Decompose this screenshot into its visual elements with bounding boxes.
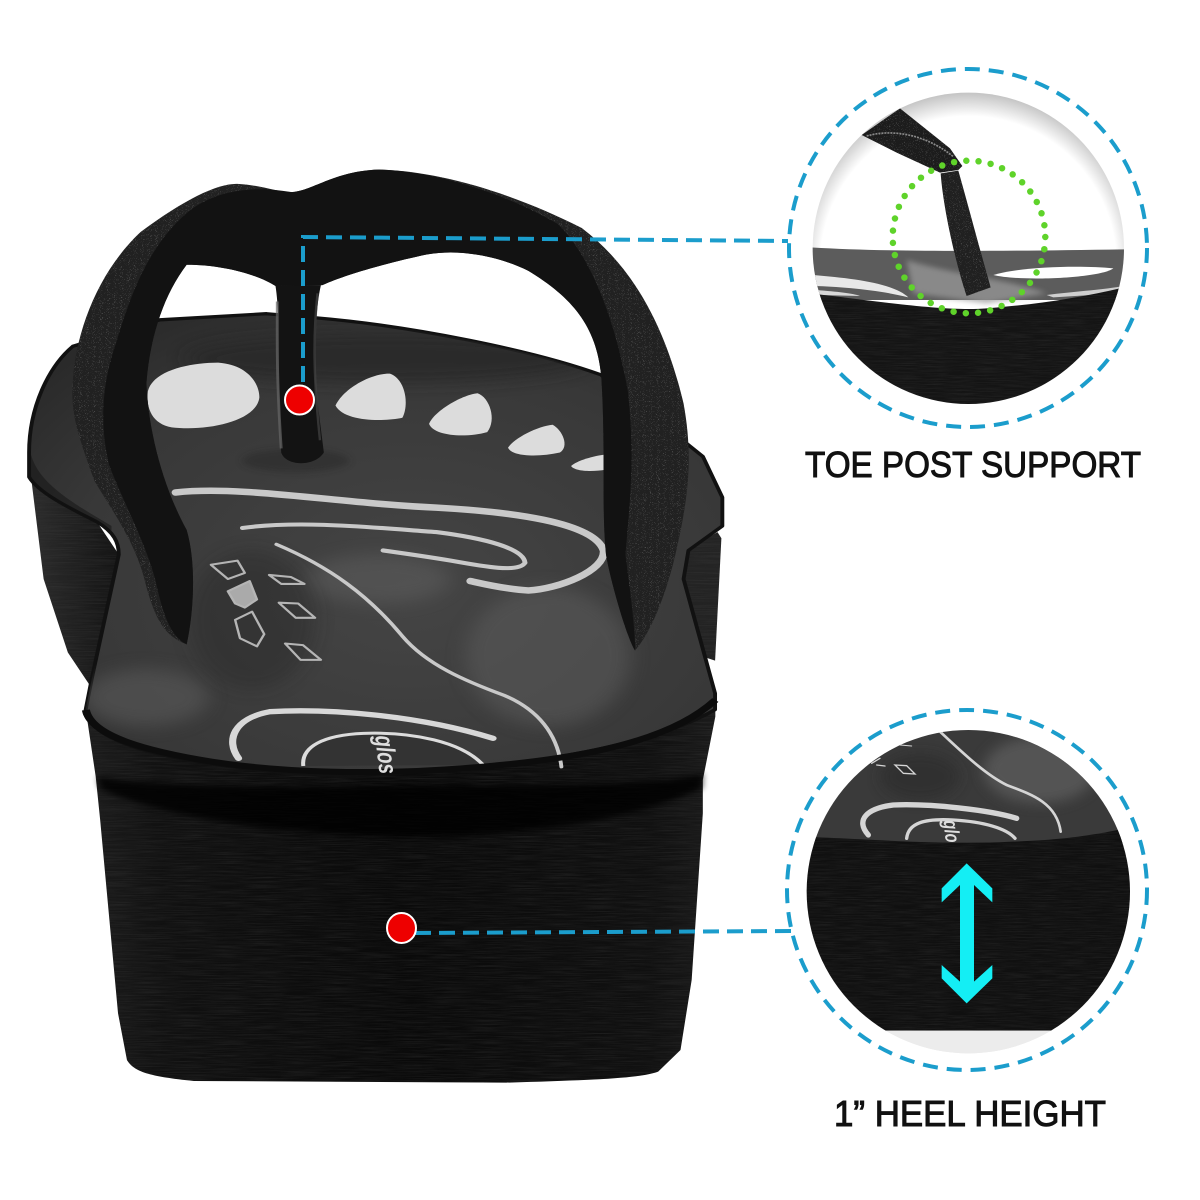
right wedge side [679,532,721,661]
marker: toe post [285,386,314,414]
logo text: glos [369,734,404,775]
callout: toe post support [789,69,1147,485]
sandal [15,170,795,1083]
callout: heel height [787,710,1147,1134]
rim edge [86,700,715,772]
heel block [87,693,715,1083]
surface shading [15,334,630,726]
left wedge side [32,481,119,685]
footbed platform [15,314,722,774]
platform surface [29,314,722,774]
detail lens [810,90,1127,407]
strap and toe post [72,170,689,650]
strap glitter edge [72,170,689,650]
platform edge [810,247,1127,300]
marker: heel [387,913,416,943]
sole [810,287,1127,407]
detail lens [803,727,1133,1061]
footbed lines [863,732,1061,838]
label: toe post support: TOE POST SUPPORT [805,444,1141,485]
height arrow [942,863,992,1003]
floor fade [886,1030,1051,1031]
toe dots [148,363,606,471]
strap piece [862,108,962,173]
toe gaps [993,267,1113,278]
green dotted highlight [893,161,1045,313]
toe post [275,285,324,463]
connector line: heel [415,931,795,933]
logo text: glos [939,819,965,851]
leaf and diamond marks [211,561,321,660]
footprint contour lines [175,491,604,767]
dashed ring [789,69,1147,427]
heel band [803,827,1133,1031]
label: heel height: 1” HEEL HEIGHT [834,1093,1106,1134]
connector line: toe post [303,237,788,382]
strap smooth band [103,170,635,650]
dashed ring [787,710,1147,1070]
post piece [941,171,991,296]
logo badge [86,700,715,772]
